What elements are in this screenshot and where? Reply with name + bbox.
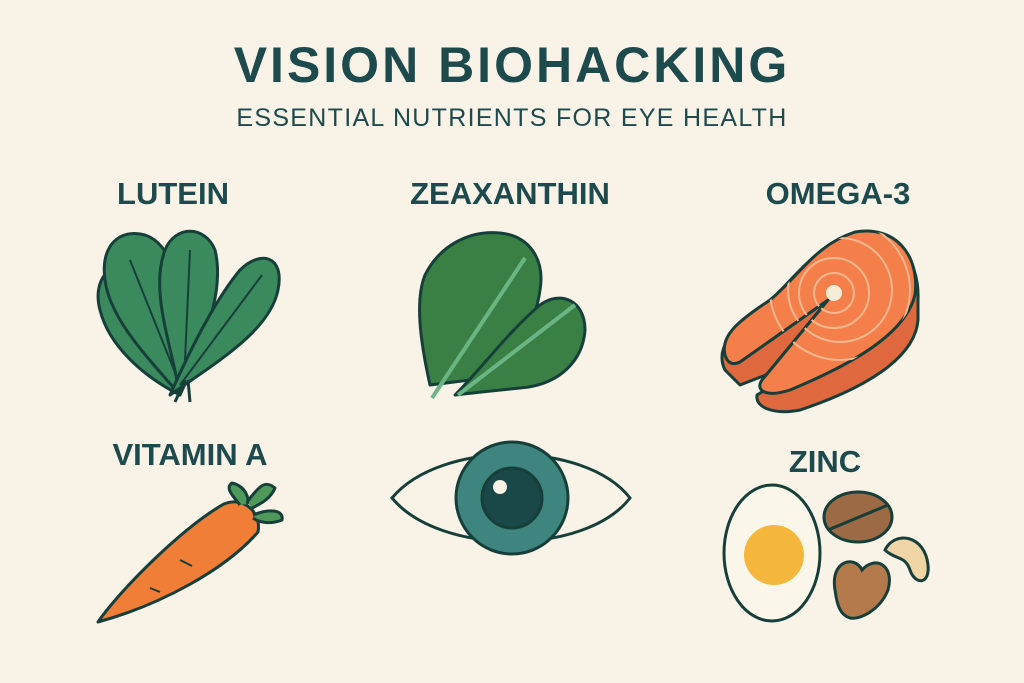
icon: carrot [98,483,282,622]
label: zeaxanthin: ZEAXANTHIN [410,176,610,211]
label: lutein: LUTEIN [117,176,229,211]
label: zinc: ZINC [789,444,861,479]
title: VISION BIOHACKING [234,37,790,93]
icon: eye [392,442,630,554]
label: omega-3: OMEGA-3 [766,176,910,211]
subtitle: ESSENTIAL NUTRIENTS FOR EYE HEALTH [236,104,788,132]
icon: spinach [98,231,279,402]
icon: kale [420,233,585,398]
icon: salmon steak [722,220,918,412]
label: vitamin a: VITAMIN A [112,437,268,472]
icon: egg and nuts [724,485,928,621]
